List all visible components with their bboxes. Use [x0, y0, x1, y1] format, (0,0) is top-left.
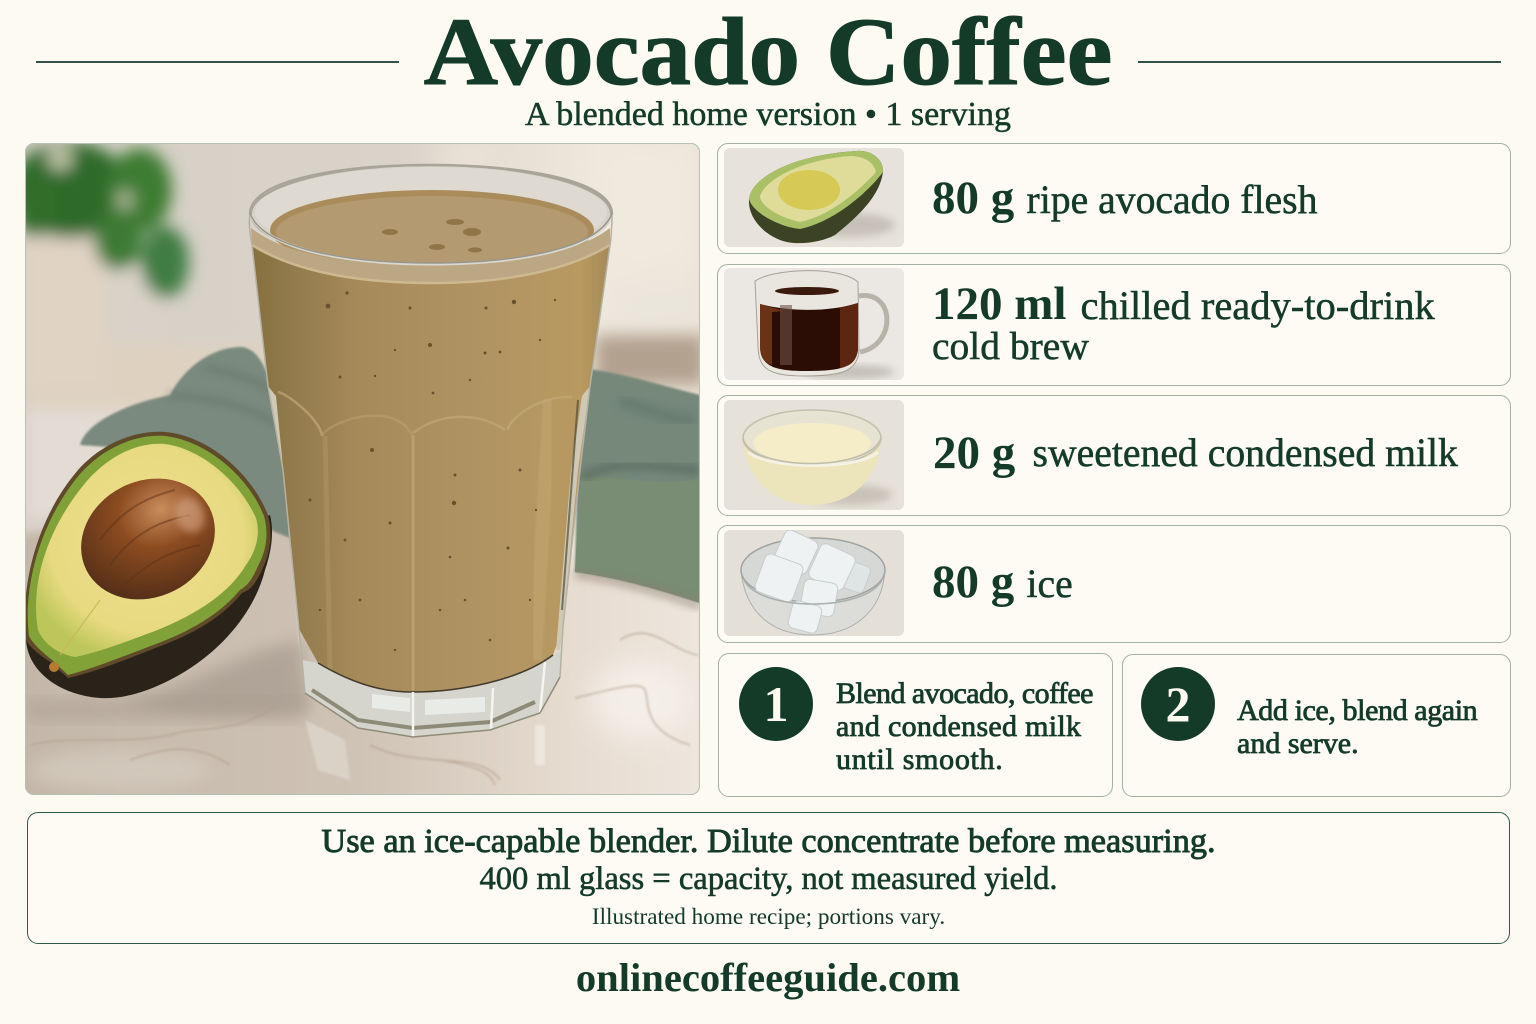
facets	[278, 392, 572, 436]
thumbnail: avocado	[724, 148, 904, 247]
title rule right	[1138, 61, 1501, 63]
ingredient name line 2: cold brew	[932, 324, 1089, 368]
ingredient card: avocado	[717, 143, 1511, 254]
drink body	[252, 245, 610, 692]
thumbnail: bowl of condensed milk	[724, 400, 904, 510]
ingredient amount: 20 g	[933, 426, 1015, 478]
step 1 panel	[718, 653, 1113, 797]
step number 1: 1	[764, 676, 788, 732]
disclaimer: Illustrated home recipe; portions vary.	[592, 904, 945, 930]
step 2 text: and serve.	[1237, 727, 1359, 760]
step 1 text: Blend avocado, coffee	[836, 677, 1093, 710]
empty rim area	[251, 165, 611, 263]
background wall	[25, 143, 700, 795]
step 2 panel	[1122, 654, 1511, 797]
step 1 text: until smooth.	[836, 743, 1003, 776]
photo panel: avocado coffee in glass	[25, 143, 700, 795]
speckles	[308, 291, 556, 651]
step 2 text	[1236, 694, 1478, 760]
avocado half	[25, 432, 272, 698]
note line 1: Use an ice-capable blender. Dilute concentrate before measuring.	[321, 822, 1216, 860]
marble veins	[30, 633, 698, 785]
ingredient name: ripe avocado flesh	[1026, 178, 1317, 222]
step number 1	[739, 667, 813, 741]
rim highlight	[250, 165, 612, 214]
thumbnail: bowl of ice	[724, 530, 904, 636]
ingredient amount: 120 ml	[932, 278, 1066, 330]
ingredient amount: 80 g	[932, 556, 1014, 608]
ingredient card: condensed milk	[717, 395, 1511, 516]
glass	[249, 165, 612, 780]
ingredient name: chilled ready-to-drink	[1080, 282, 1435, 328]
note panel	[27, 812, 1510, 944]
thumbnail: jug of cold brew	[724, 268, 904, 380]
ingredient card: ice	[717, 525, 1511, 643]
glass side walls	[268, 386, 302, 660]
subtitle: A blended home version • 1 serving	[525, 96, 1011, 133]
step 2 text: Add ice, blend again	[1237, 694, 1477, 727]
note line 2: 400 ml glass = capacity, not measured yield.	[479, 860, 1058, 896]
ingredient name: sweetened condensed milk	[1032, 430, 1458, 474]
marble counter	[0, 500, 740, 840]
step number 2	[1141, 667, 1215, 741]
title rule left	[36, 61, 399, 63]
ingredient name: ice	[1026, 562, 1073, 606]
towel	[80, 347, 700, 606]
drink surface	[270, 190, 594, 270]
step number 2: 2	[1166, 676, 1190, 732]
reflection on counter	[305, 720, 350, 780]
step 1 text	[836, 677, 1093, 776]
ingredient amount: 80 g	[932, 172, 1014, 224]
title: Avocado Coffee	[424, 0, 1112, 105]
footer website: onlinecoffeeguide.com	[576, 955, 960, 1000]
glass base	[302, 650, 561, 737]
step 1 text: and condensed milk	[836, 710, 1081, 743]
ingredient card: cold brew	[717, 264, 1511, 386]
glass lip overlay	[251, 228, 610, 283]
